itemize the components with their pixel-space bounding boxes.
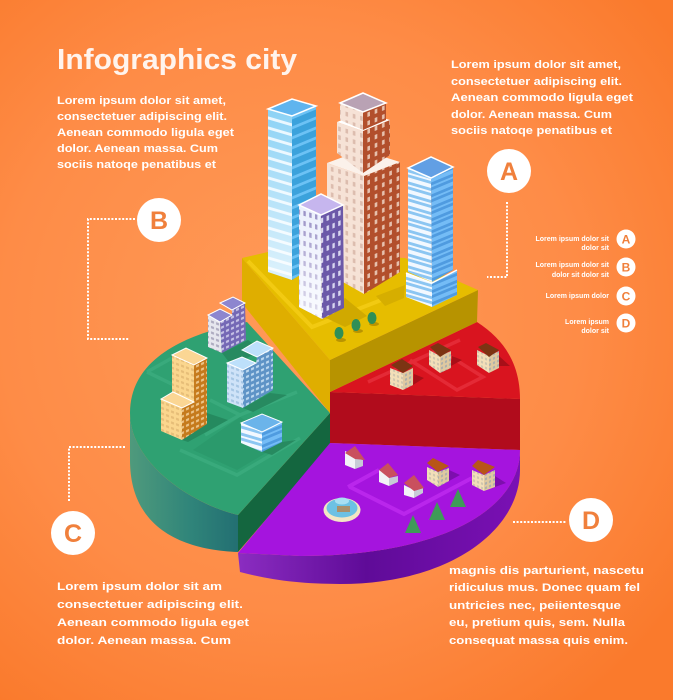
text block: top left: sociis natoqe penatibus et (57, 159, 216, 171)
legend: D (622, 316, 631, 330)
building: small blue on green (227, 341, 287, 412)
text block: bottom left: consectetuer adipiscing elit. (57, 599, 243, 611)
legend (535, 230, 636, 335)
text block: top left (57, 95, 234, 171)
building: small purple on green (208, 297, 262, 366)
trees on yellow (334, 312, 379, 342)
text block: top left: Aenean commodo ligula eget (57, 127, 234, 139)
marker B: B (150, 207, 168, 235)
legend: dolor sit (581, 245, 610, 252)
text block: bottom left: Aenean commodo ligula eget (57, 617, 249, 629)
text block: top right: Lorem ipsum dolor sit amet, (451, 59, 621, 71)
marker C (51, 511, 95, 555)
text block: top left: dolor. Aenean massa. Cum (57, 143, 218, 155)
legend: Lorem ipsum dolor sit (535, 262, 610, 269)
building: tall blue tower (268, 99, 316, 280)
marker A (487, 149, 531, 193)
marker D (569, 498, 613, 542)
text block: top left: consectetuer adipiscing elit. (57, 111, 227, 123)
text block: top right (451, 59, 633, 137)
building: right blue tower (406, 157, 457, 307)
houses on red (390, 343, 510, 390)
marker C: C (64, 520, 82, 548)
building: brick tower (327, 93, 400, 294)
text block: bottom right (449, 565, 644, 647)
marker B (137, 198, 181, 242)
legend: dolor sit dolor sit (552, 272, 610, 279)
text block: bottom left: Lorem ipsum dolor sit am (57, 581, 222, 593)
title: Infographics city (57, 44, 297, 76)
text block: top left: Lorem ipsum dolor sit amet, (57, 95, 226, 107)
dotted leader lines (69, 202, 566, 522)
pie segment: red (330, 322, 520, 450)
legend: Lorem ipsum dolor (546, 293, 609, 300)
text block: top right: Aenean commodo ligula eget (451, 92, 633, 104)
text block: bottom right: eu, pretium quis, sem. Nulla (449, 617, 626, 629)
legend: Lorem ipsum (565, 319, 609, 326)
marker A: A (500, 158, 518, 186)
pie segment: purple (238, 443, 520, 584)
building: low blue on green (241, 414, 296, 455)
legend: dolor sit (581, 328, 610, 335)
fountain (324, 498, 360, 522)
text block: bottom right: consequat massa quis enim. (449, 635, 628, 647)
trees on purple (405, 489, 466, 533)
text block: bottom right: ridiculus mus. Donec quam fel (449, 582, 640, 594)
pie segment: yellow base (242, 252, 478, 413)
legend: C (622, 290, 631, 304)
text block: top right: consectetuer adipiscing elit. (451, 76, 622, 88)
building: purple tower (299, 194, 344, 319)
small houses on purple (345, 446, 424, 498)
text block: bottom right: untricies nec, peiientesque (449, 600, 621, 612)
legend: A (622, 232, 631, 246)
building: small orange on green (161, 348, 228, 442)
text block: top right: sociis natoqe penatibus et (451, 125, 612, 137)
text block: top right: dolor. Aenean massa. Cum (451, 109, 612, 121)
apartments on purple (427, 458, 506, 491)
legend: Lorem ipsum dolor sit (535, 236, 610, 243)
pie segment: green (130, 322, 330, 552)
text block: bottom right: magnis dis parturient, nascetu (449, 565, 644, 577)
text block: bottom left (57, 581, 249, 647)
marker D: D (582, 507, 600, 535)
legend: B (622, 260, 631, 274)
text block: bottom left: dolor. Aenean massa. Cum (57, 635, 231, 647)
